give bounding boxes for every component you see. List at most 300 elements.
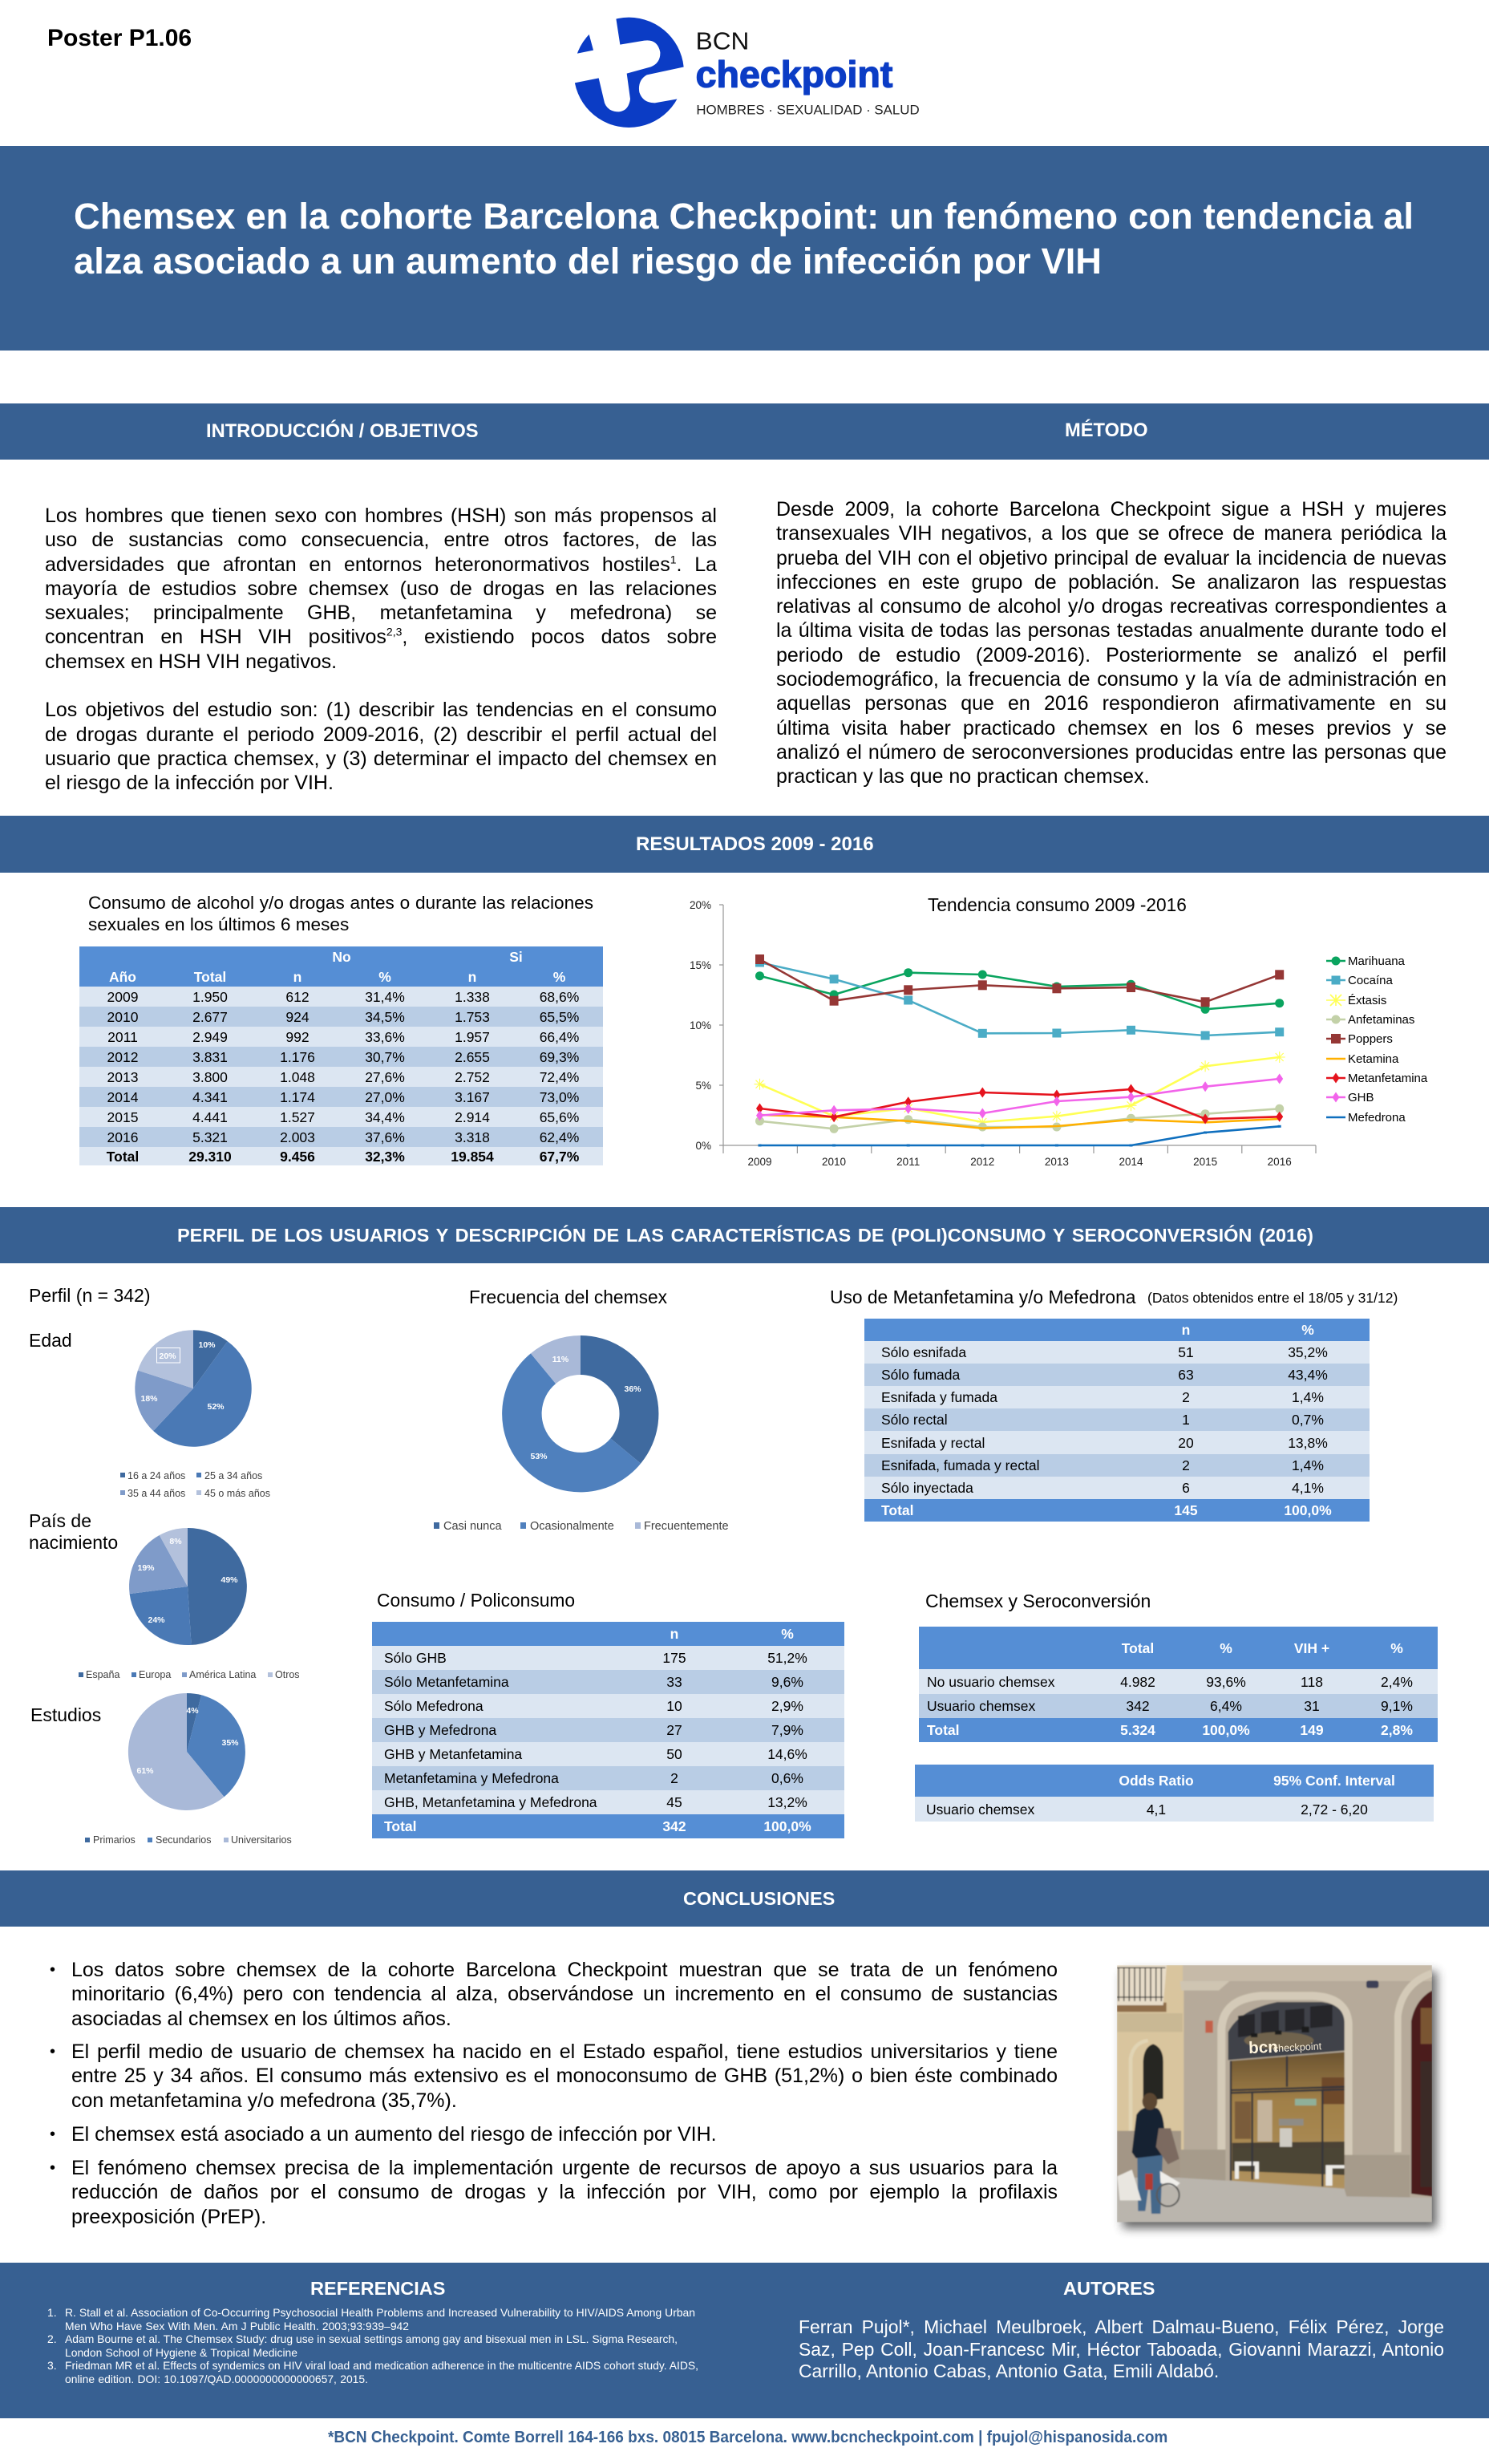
table: uso de metanfetamina y/o mefedrona: 1,4% [1292, 1389, 1324, 1405]
table: consumo por año: Total [194, 969, 226, 985]
bullet 4: • [50, 2159, 55, 2177]
table: consumo por año: 1.048 [280, 1068, 315, 1084]
text: (Datos obtenidos entre el 18/05 y 31/12) [1147, 1290, 1398, 1306]
text block: método: relativas al consumo de alcohol y/o drogas recreativas correspondientes a [776, 595, 1447, 618]
table: consumo / policonsumo: Metanfetamina y Mefedrona [384, 1770, 559, 1786]
table: consumo por año: 67,7% [540, 1149, 579, 1165]
chart legend: Poppers [1348, 1032, 1393, 1046]
poster number: Poster P1.06 [47, 25, 192, 51]
reference list: Men Who Have Sex With Men. Am J Public Health. 2003;93:939–942 [65, 2320, 409, 2332]
x axis labels: 2010 [822, 1156, 846, 1168]
table: consumo / policonsumo: 45 [666, 1794, 682, 1810]
reference list: 3. [47, 2359, 57, 2372]
text block: introducción y objetivos: uso de sustancias como consecuencia, entre otros factores, de las [45, 529, 717, 551]
pie chart: país de nacimiento: Otros [275, 1669, 300, 1680]
table: uso de metanfetamina y/o mefedrona: Sólo rectal [881, 1412, 948, 1428]
table: consumo / policonsumo: GHB y Mefedrona [384, 1722, 496, 1738]
author list: Ferran Pujol*, Michael Meulbroek, Albert Dalmau-Bueno, Félix Pérez, Jorge [799, 2316, 1444, 2337]
text block: método: la última visita de todas las personas testadas anualmente durante todo el [776, 619, 1447, 642]
heading: autores: AUTORES [1063, 2278, 1155, 2299]
table: uso de metanfetamina y/o mefedrona: 4,1% [1292, 1480, 1324, 1496]
table: consumo por año: 29.310 [188, 1149, 232, 1165]
text block: introducción y objetivos: Los objetivos del estudio son: (1) describir las tendencias en el consumo [45, 699, 717, 721]
text block: introducción y objetivos: chemsex en HSH VIH negativos. [45, 650, 337, 673]
table: consumo por año: Total [107, 1149, 139, 1165]
table: consumo por año: 3.318 [455, 1129, 490, 1145]
series lines [760, 959, 1280, 1145]
pie chart: país de nacimiento: 8% [169, 1537, 182, 1546]
table: chemsex y seroconversión: 4.982 [1120, 1673, 1155, 1689]
table: chemsex y seroconversión: 100,0% [1202, 1722, 1250, 1738]
table: consumo / policonsumo [372, 1622, 844, 1838]
table: chemsex y seroconversión: 2,8% [1381, 1722, 1413, 1738]
table: consumo por año: 2012 [107, 1049, 138, 1065]
table: consumo por año: 37,6% [365, 1129, 405, 1145]
table: uso de metanfetamina y/o mefedrona [864, 1319, 1370, 1522]
table: odds ratio: 2,72 - 6,20 [1301, 1801, 1368, 1818]
table: consumo por año: 2.677 [192, 1009, 228, 1025]
photo: fachada de BCN Checkpoint: checkpoint [1273, 2040, 1322, 2054]
table: consumo por año: 19.854 [451, 1149, 494, 1165]
bullet 4: El fenómeno chemsex precisa de la implementación urgente de recursos de apoyo a sus usuarios para la [71, 2157, 1058, 2179]
table: uso de metanfetamina y/o mefedrona: 1 [1182, 1412, 1190, 1428]
text block: método: practican y las que no practican chemsex. [776, 765, 1150, 788]
title [74, 196, 1414, 282]
table: uso de metanfetamina y/o mefedrona: Esnifada, fumada y rectal [881, 1457, 1039, 1473]
table: odds ratio: Odds Ratio [1119, 1773, 1194, 1789]
table: consumo por año: 27,6% [365, 1068, 405, 1084]
table: consumo por año: 3.800 [192, 1068, 228, 1084]
icon: BCN Checkpoint logo: BCN [696, 27, 749, 55]
pie chart: edad: 16 a 24 años [127, 1470, 185, 1481]
photo: fachada de BCN Checkpoint: bcn [1248, 2038, 1278, 2057]
table: consumo por año: 66,4% [540, 1028, 579, 1044]
table: chemsex y seroconversión: 31 [1304, 1698, 1320, 1714]
reference list: online edition. DOI: 10.1097/QAD.0000000000000657, 2015. [65, 2373, 368, 2385]
pie chart: edad [29, 1330, 270, 1499]
title: Chemsex en la cohorte Barcelona Checkpoint: un fenómeno con tendencia al [74, 196, 1414, 237]
table: uso de metanfetamina y/o mefedrona: 43,4% [1288, 1367, 1328, 1383]
table: uso de metanfetamina y/o mefedrona: Esnifada y rectal [881, 1434, 985, 1450]
table: consumo / policonsumo: 9,6% [771, 1674, 803, 1690]
table: consumo por año: 2.949 [192, 1028, 228, 1044]
table: consumo por año: 924 [285, 1009, 310, 1025]
table: consumo por año [79, 946, 603, 1165]
pie chart: estudios: Primarios [93, 1834, 136, 1846]
pie chart: país de nacimiento [29, 1510, 300, 1680]
donut legend: Casi nunca [443, 1520, 502, 1533]
pie chart: estudios: Estudios [30, 1704, 101, 1725]
chart legend: Mefedrona [1348, 1111, 1406, 1125]
line chart: tendencia consumo 2009-2016 [690, 894, 1428, 1168]
table: consumo / policonsumo: Sólo Mefedrona [384, 1698, 484, 1714]
text block: introducción y objetivos: concentran en HSH VIH positivos2,3, existiendo pocos datos sobre [45, 626, 717, 648]
panel: page header with poster number and logo [47, 18, 920, 128]
table: chemsex y seroconversión: 118 [1301, 1673, 1323, 1689]
author list: Carrillo, Antonio Cabas, Antonio Gata, Emili Aldabó. [799, 2361, 1219, 2381]
table: uso de metanfetamina y/o mefedrona: n [1182, 1322, 1190, 1338]
chart legend: Marihuana [1348, 954, 1406, 968]
table: consumo / policonsumo: 13,2% [767, 1794, 807, 1810]
table: consumo / policonsumo: 27 [666, 1722, 682, 1738]
pie chart: país de nacimiento: 49% [221, 1575, 238, 1585]
table: chemsex y seroconversión: 342 [1126, 1698, 1150, 1714]
table: consumo por año: 3.167 [455, 1089, 490, 1105]
table: consumo / policonsumo: 175 [662, 1650, 686, 1666]
bullet 2: entre 25 y 34 años. El consumo más extensivo es el monoconsumo de GHB (51,2%) o bien éste combinado [71, 2065, 1058, 2087]
heading: conclusiones: CONCLUSIONES [683, 1888, 835, 1909]
text block: conclusiones [50, 1959, 1058, 2228]
text block: método: analizó el número de seroconversiones producidas entre las personas que [776, 741, 1447, 764]
table: consumo por año: 1.527 [280, 1108, 315, 1125]
author list: Saz, Pep Coll, Joan-Francesc Mir, Héctor Taboada, Giovanni Marazzi, Antonio [799, 2339, 1444, 2360]
pie chart: edad: 10% [198, 1340, 216, 1350]
bullet 1 [50, 1959, 1058, 2030]
table: uso de metanfetamina y/o mefedrona: 1,4% [1292, 1457, 1324, 1473]
table: consumo / policonsumo: n [670, 1626, 678, 1642]
pie chart: país de nacimiento: País de [29, 1510, 91, 1531]
table: consumo por año: 31,4% [365, 988, 405, 1004]
reference list: 2. [47, 2332, 57, 2345]
chart legend: GHB [1348, 1091, 1374, 1104]
table: odds ratio: 95% Conf. Interval [1273, 1773, 1395, 1789]
table: consumo por año: n [293, 969, 301, 985]
table: uso de metanfetamina y/o mefedrona: 35,2% [1288, 1344, 1328, 1360]
heading: introducción / objetivos: INTRODUCCIÓN / OBJETIVOS [206, 421, 479, 442]
table: uso de metanfetamina y/o mefedrona: 100,0% [1284, 1502, 1332, 1518]
bullet 1: Los datos sobre chemsex de la cohorte Barcelona Checkpoint muestran que se trata de un fenómeno [71, 1959, 1058, 1981]
y axis labels [690, 899, 711, 1152]
table: consumo / policonsumo: Sólo GHB [384, 1650, 447, 1666]
heading: método: MÉTODO [1065, 420, 1148, 441]
table: consumo por año: 68,6% [540, 988, 579, 1004]
donut slices: 36% [624, 1384, 641, 1394]
text block: introducción y objetivos: mayoría de estudios sobre chemsex (uso de drogas en las relaciones [45, 578, 717, 600]
x axis labels [747, 1156, 1292, 1168]
table: consumo por año: 2010 [107, 1009, 138, 1025]
bullet 2: con metanfetamina y/o mefedrona (35,7%). [71, 2089, 457, 2112]
table: uso de metanfetamina y/o mefedrona: Sólo fumada [881, 1367, 960, 1383]
heading: referencias: REFERENCIAS [310, 2278, 445, 2299]
table: consumo por año: 1.957 [455, 1028, 490, 1044]
panel: perfil charts column [29, 1285, 300, 1846]
reference list: R. Stall et al. Association of Co-Occurring Psychosocial Health Problems and Increased Vulnerability to HIV/AIDS Among Urban [65, 2306, 695, 2319]
table: consumo por año: 72,4% [540, 1068, 579, 1084]
table: consumo por año: 33,6% [365, 1028, 405, 1044]
reference list: Friedman MR et al. Effects of syndemics on HIV viral load and medication adherence in the multicentre AIDS cohort study. AIDS, [65, 2359, 698, 2372]
bullet 1: minoritario (6,4%) pero con tendencia al alza, observándose un incremento en el consumo de sustancias [71, 1983, 1058, 2005]
table: consumo por año: 9.456 [280, 1149, 315, 1165]
pie chart: edad: 52% [207, 1402, 225, 1412]
chart legend: Ketamina [1348, 1052, 1399, 1066]
chart legend: Cocaína [1348, 974, 1394, 987]
table: consumo por año: Año [109, 969, 136, 985]
pie chart: edad: 25 a 34 años [204, 1470, 262, 1481]
table: consumo por año: n [468, 969, 476, 985]
table: uso de metanfetamina y/o mefedrona: Sólo esnifada [881, 1344, 966, 1360]
table: consumo por año: 27,0% [365, 1089, 405, 1105]
pie chart: estudios: Secundarios [156, 1834, 212, 1846]
table: consumo por año: 73,0% [540, 1089, 579, 1105]
donut chart: frecuencia del chemsex [434, 1287, 729, 1533]
section heading band: introducción and método [0, 403, 1489, 460]
section heading band: conclusiones [0, 1870, 1489, 1927]
donut slices: 53% [530, 1452, 548, 1461]
table: uso de metanfetamina y/o mefedrona: 63 [1178, 1367, 1194, 1383]
table: uso de metanfetamina y/o mefedrona: 6 [1182, 1480, 1190, 1496]
table: uso de metanfetamina y/o mefedrona: 145 [1174, 1502, 1198, 1518]
table: consumo por año: 1.950 [192, 988, 228, 1004]
table: odds ratio: 4,1 [1147, 1801, 1166, 1818]
footer contact line: *BCN Checkpoint. Comte Borrell 164-166 bxs. 08015 Barcelona. www.bcncheckpoint.com | fpujol@hispanosida.com [328, 2429, 1167, 2446]
table: consumo por año: 1.174 [280, 1089, 315, 1105]
section heading band: perfil [0, 1207, 1489, 1263]
text block: método [776, 498, 1447, 788]
table: consumo / policonsumo: 50 [666, 1746, 682, 1762]
table: chemsex y seroconversión: 6,4% [1210, 1698, 1242, 1714]
bullet 3: El chemsex está asociado a un aumento del riesgo de infección por VIH. [71, 2123, 717, 2146]
x axis labels: 2014 [1119, 1156, 1143, 1168]
heading: uso de metanfetamina [830, 1287, 1398, 1307]
table: consumo por año: 1.176 [280, 1049, 315, 1065]
table: consumo por año: % [378, 969, 391, 985]
table: consumo por año: 2013 [107, 1068, 138, 1084]
pie chart: país de nacimiento: 19% [137, 1563, 155, 1573]
photo: fachada de BCN Checkpoint [1115, 1964, 1445, 2236]
donut slices [502, 1335, 658, 1492]
pie chart: país de nacimiento: España [86, 1669, 119, 1680]
x axis labels: 2015 [1193, 1156, 1217, 1168]
chart legend [1326, 954, 1428, 1125]
pie chart: edad: Edad [29, 1330, 72, 1351]
pie chart: estudios: 61% [136, 1766, 154, 1776]
section heading band: resultados [0, 816, 1489, 873]
table: consumo por año: 2014 [107, 1089, 138, 1105]
table: consumo / policonsumo: % [781, 1626, 794, 1642]
table: consumo por año: 2015 [107, 1108, 138, 1125]
pie chart: edad: 35 a 44 años [127, 1488, 185, 1499]
reference list: London School of Hygiene & Tropical Medicine [65, 2346, 297, 2359]
chart legend: Anfetaminas [1348, 1013, 1414, 1027]
table: consumo por año: No [332, 948, 351, 964]
table: chemsex y seroconversión: No usuario chemsex [927, 1673, 1055, 1689]
heading: chemsex y seroconversión: Chemsex y Seroconversión [925, 1591, 1151, 1611]
table: consumo / policonsumo: 100,0% [763, 1818, 811, 1834]
table: consumo por año: 4.441 [192, 1108, 228, 1125]
heading: consumo / policonsumo: Consumo / Policonsumo [377, 1590, 575, 1611]
x axis labels: 2016 [1268, 1156, 1292, 1168]
table: uso de metanfetamina y/o mefedrona: 2 [1182, 1389, 1190, 1405]
x axis labels: 2009 [747, 1156, 772, 1168]
table: consumo por año: 2.914 [455, 1108, 490, 1125]
pie chart: estudios: 35% [221, 1738, 239, 1748]
icon: BCN Checkpoint logo [574, 18, 920, 128]
text block: método: infecciones en este grupo de población. Se analizaron las respuestas [776, 571, 1447, 594]
text block: introducción y objetivos [45, 505, 717, 794]
heading: consumo table: sexuales en los últimos 6 meses [88, 914, 349, 934]
table: consumo por año: 32,3% [365, 1149, 405, 1165]
heading: perfil: Perfil (n = 342) [29, 1285, 151, 1306]
reference list: Adam Bourne et al. The Chemsex Study: drug use in sexual settings among gay and bisexual men in LSL. Sigma Research, [65, 2332, 678, 2345]
bullet 1: asociadas al chemsex en los últimos años. [71, 2008, 451, 2030]
table: consumo por año: 34,5% [365, 1009, 405, 1025]
table: chemsex y seroconversión: Total [927, 1722, 960, 1738]
table: consumo por año: 2016 [107, 1129, 138, 1145]
table: consumo por año: 2011 [107, 1028, 138, 1044]
table: consumo por año: 2.003 [280, 1129, 315, 1145]
table: uso de metanfetamina y/o mefedrona: 13,8% [1288, 1434, 1328, 1450]
table: chemsex y seroconversión: % [1220, 1639, 1232, 1656]
reference list [47, 2306, 698, 2385]
table: consumo / policonsumo: Total [384, 1818, 417, 1834]
table: uso de metanfetamina y/o mefedrona: Total [881, 1502, 914, 1518]
table: consumo / policonsumo: GHB y Metanfetamina [384, 1746, 522, 1762]
icon: BCN Checkpoint logo: HOMBRES · SEXUALIDAD · SALUD [696, 103, 920, 117]
y axis labels: 5% [695, 1080, 711, 1092]
chart legend: Éxtasis [1348, 994, 1386, 1007]
table: consumo / policonsumo: 2 [670, 1770, 678, 1786]
table: chemsex y seroconversión [919, 1627, 1438, 1742]
bullet 4: preexposición (PrEP). [71, 2206, 266, 2228]
table: consumo / policonsumo: 0,6% [771, 1770, 803, 1786]
pie chart: país de nacimiento: Europa [139, 1669, 171, 1680]
table: uso de metanfetamina y/o mefedrona: Sólo inyectada [881, 1480, 973, 1496]
bullet 4 [50, 2157, 1058, 2228]
table: consumo por año: 992 [285, 1028, 310, 1044]
reference list: 1. [47, 2306, 57, 2319]
text block: introducción y objetivos: adversidades que afrontan en entornos heteronormativos hostiles1. La [45, 553, 717, 576]
bullet 1: • [50, 1961, 55, 1979]
x axis labels: 2013 [1045, 1156, 1069, 1168]
table: consumo por año: 69,3% [540, 1049, 579, 1065]
text block: introducción y objetivos: Los hombres que tienen sexo con hombres (HSH) son más propensos al [45, 505, 717, 527]
table: chemsex y seroconversión: Usuario chemsex [927, 1698, 1035, 1714]
pie chart: país de nacimiento: nacimiento [29, 1532, 118, 1553]
panel: resultados [79, 893, 1428, 1168]
chart axes [719, 905, 1316, 1153]
heading: consumo table [88, 893, 593, 934]
donut legend [434, 1520, 729, 1533]
bullet 2 [50, 2040, 1058, 2112]
bullet 2: • [50, 2043, 55, 2061]
table: consumo por año: 62,4% [540, 1129, 579, 1145]
bullet 2: El perfil medio de usuario de chemsex ha nacido en el Estado español, tiene estudios universitarios y tiene [71, 2040, 1058, 2063]
table: odds ratio: Usuario chemsex [926, 1801, 1034, 1818]
text block: método: última visita haber practicado chemsex en los 6 meses previos y se [776, 717, 1447, 740]
table: consumo / policonsumo: GHB, Metanfetamina y Mefedrona [384, 1794, 597, 1810]
table: consumo por año: 65,5% [540, 1009, 579, 1025]
table: consumo por año: 30,7% [365, 1049, 405, 1065]
heading: uso de metanfetamina: Uso de Metanfetamina y/o Mefedrona [830, 1287, 1135, 1307]
text block: método: aquellas personas que en 2016 respondieron afirmativamente en su [776, 692, 1447, 715]
heading: consumo table: Consumo de alcohol y/o drogas antes o durante las relaciones [88, 893, 593, 913]
title banner [0, 146, 1489, 351]
table: consumo por año: 34,4% [365, 1108, 405, 1125]
heading: resultados: RESULTADOS 2009 - 2016 [636, 833, 874, 855]
table: uso de metanfetamina y/o mefedrona: Esnifada y fumada [881, 1389, 997, 1405]
text block: método: periodo de estudio (2009-2016). Posteriormente se analizó el perfil [776, 644, 1447, 667]
donut slices: 11% [552, 1355, 569, 1364]
table: consumo / policonsumo: 51,2% [767, 1650, 807, 1666]
table: uso de metanfetamina y/o mefedrona: 51 [1178, 1344, 1194, 1360]
table: chemsex y seroconversión: 149 [1300, 1722, 1324, 1738]
table: chemsex y seroconversión: VIH + [1294, 1639, 1329, 1656]
table: uso de metanfetamina y/o mefedrona: % [1301, 1322, 1314, 1338]
table: uso de metanfetamina y/o mefedrona: 20 [1178, 1434, 1194, 1450]
table: consumo por año: 5.321 [192, 1129, 228, 1145]
table: chemsex y seroconversión: Total [1122, 1639, 1154, 1656]
table: uso de metanfetamina y/o mefedrona: 0,7% [1292, 1412, 1324, 1428]
pie chart: edad: 45 o más años [204, 1488, 270, 1499]
text block: introducción y objetivos: de drogas durante el periodo 2009-2016, (2) describir el perfil actual del [45, 723, 717, 746]
table: consumo / policonsumo: 7,9% [771, 1722, 803, 1738]
text block: introducción y objetivos: sexuales; principalmente GHB, metanfetamina y mefedrona) se [45, 602, 717, 624]
panel: referencias y autores band [0, 2263, 1489, 2418]
chart legend: Metanfetamina [1348, 1072, 1428, 1085]
table: consumo / policonsumo: 342 [662, 1818, 686, 1834]
table: consumo por año: 2009 [107, 988, 138, 1004]
pie chart: país de nacimiento: América Latina [189, 1669, 256, 1680]
table: consumo por año: 2.752 [455, 1068, 490, 1084]
table: consumo por año: 1.753 [455, 1009, 490, 1025]
table: consumo por año: 3.831 [192, 1049, 228, 1065]
table: chemsex y seroconversión: 5.324 [1120, 1722, 1155, 1738]
table: consumo por año: 2.655 [455, 1049, 490, 1065]
text block: introducción y objetivos: el riesgo de la infección por VIH. [45, 772, 334, 794]
pie chart: estudios: 4% [186, 1706, 199, 1716]
table: chemsex y seroconversión: 9,1% [1381, 1698, 1413, 1714]
chart title: Tendencia consumo 2009 -2016 [928, 894, 1187, 915]
y axis labels: 10% [690, 1019, 711, 1031]
text block: introducción y objetivos: usuario que practica chemsex, y (3) determinar el impacto del chemsex en [45, 748, 717, 770]
text block: método: transexuales VIH negativos, a los que se ofrece de manera periódica la [776, 522, 1447, 545]
table: consumo / policonsumo: 2,9% [771, 1698, 803, 1714]
text block: método: prueba del VIH con el objetivo principal de evaluar la incidencia de nuevas [776, 547, 1447, 569]
icon: BCN Checkpoint logo: checkpoint [696, 53, 892, 95]
pie chart: estudios [30, 1693, 292, 1846]
table: consumo por año: 612 [285, 988, 310, 1004]
table: chemsex y seroconversión: 2,4% [1381, 1673, 1413, 1689]
table: odds ratio [915, 1765, 1434, 1822]
y axis labels: 20% [690, 899, 711, 911]
table: consumo por año: 4.341 [192, 1089, 228, 1105]
pie chart: país de nacimiento: 24% [148, 1615, 165, 1625]
heading: perfil de los usuarios: PERFIL DE LOS USUARIOS Y DESCRIPCIÓN DE LAS CARACTERÍSTICAS DE (POLI)CONSUMO Y SEROCONVERSIÓN (2016) [177, 1225, 1313, 1246]
table: consumo por año: % [553, 969, 565, 985]
bullet 3: • [50, 2126, 55, 2143]
x axis labels: 2012 [970, 1156, 994, 1168]
table: consumo por año: 65,6% [540, 1108, 579, 1125]
table: consumo / policonsumo: 10 [666, 1698, 682, 1714]
table: consumo / policonsumo: Sólo Metanfetamina [384, 1674, 509, 1690]
table: chemsex y seroconversión: 93,6% [1206, 1673, 1246, 1689]
table: chemsex y seroconversión: % [1390, 1639, 1403, 1656]
bullet 4: reducción de daños por el consumo de drogas y la infección por VIH, como por ejemplo la profilaxis [71, 2181, 1058, 2203]
table: consumo por año: 1.338 [455, 988, 490, 1004]
pie chart: estudios: Universitarios [231, 1834, 292, 1846]
table: consumo / policonsumo: 14,6% [767, 1746, 807, 1762]
y axis labels: 15% [690, 959, 711, 971]
y axis labels: 0% [695, 1140, 711, 1152]
pie chart: edad: 20% [159, 1352, 176, 1361]
table: uso de metanfetamina y/o mefedrona: 2 [1182, 1457, 1190, 1473]
title: alza asociado a un aumento del riesgo de infección por VIH [74, 241, 1102, 282]
text block: método: Desde 2009, la cohorte Barcelona Checkpoint sigue a HSH y mujeres [776, 498, 1447, 521]
text block: método: sociodemográfico, la frecuencia de consumo y la vía de administración en [776, 668, 1447, 691]
donut legend: Ocasionalmente [530, 1520, 614, 1533]
donut legend: Frecuentemente [644, 1520, 729, 1533]
table: consumo por año: Si [509, 948, 523, 964]
